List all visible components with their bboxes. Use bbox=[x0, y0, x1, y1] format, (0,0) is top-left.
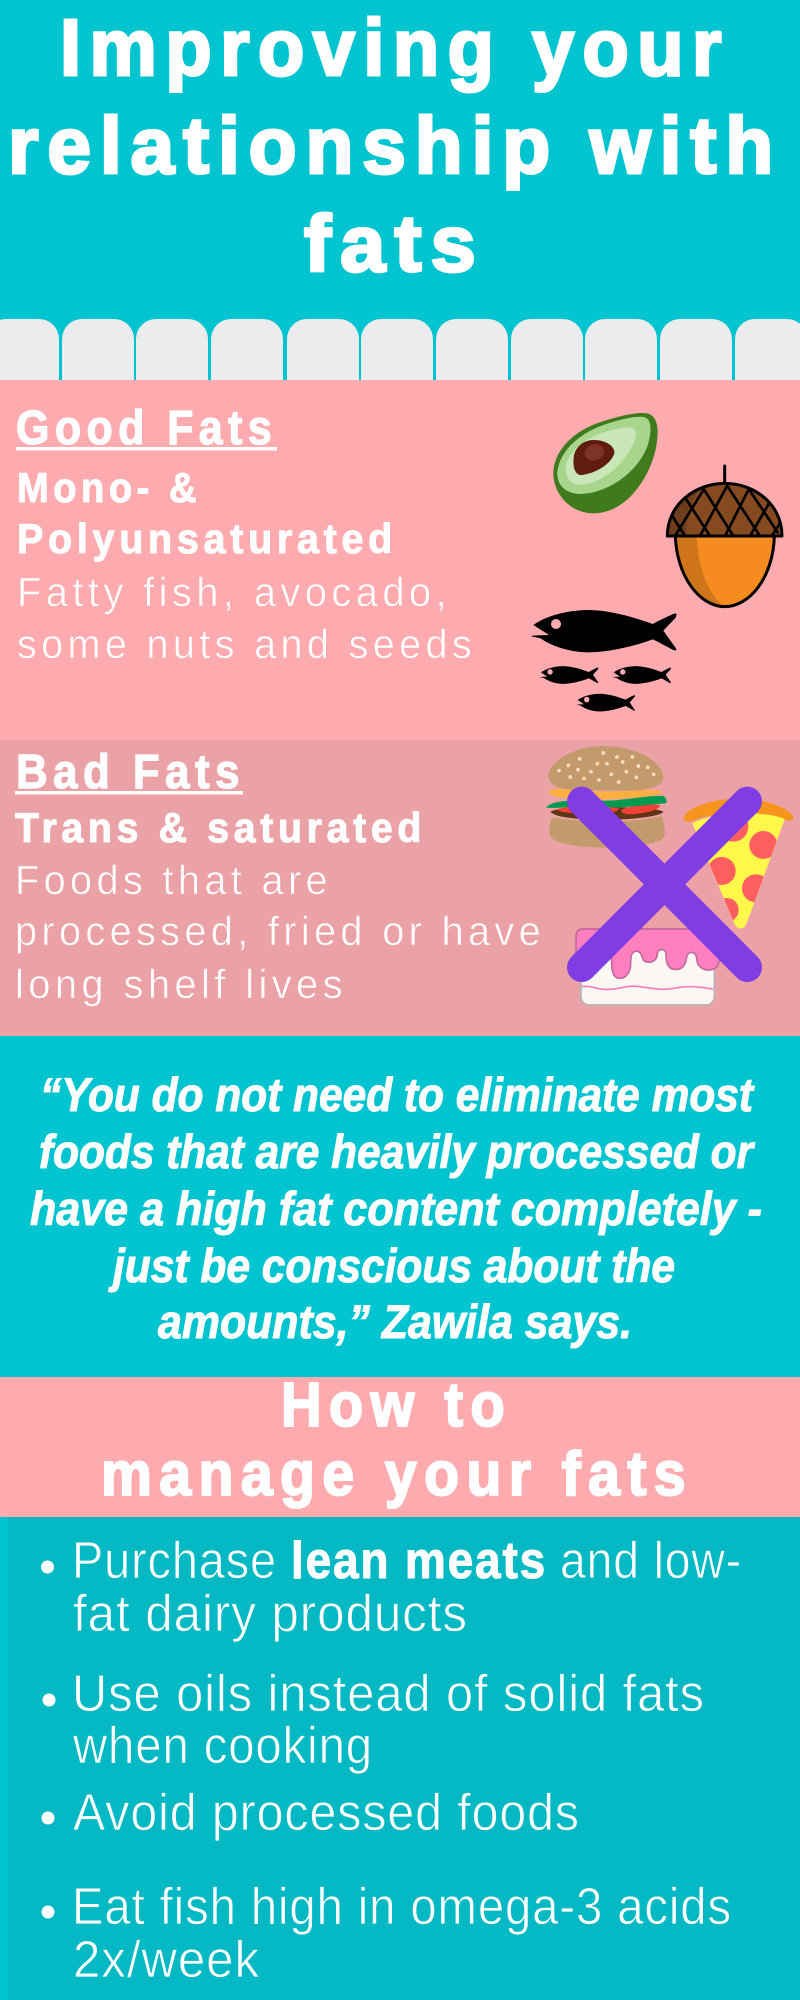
picket fence divider bbox=[0, 319, 800, 399]
quote bbox=[30, 1068, 762, 1348]
icon: acorn bbox=[667, 466, 783, 607]
panel: bad fats bbox=[0, 740, 800, 1036]
icon: cake bbox=[576, 929, 719, 1005]
panel: how to heading: manage your fats bbox=[101, 1440, 693, 1509]
quote: just be conscious about the bbox=[108, 1239, 675, 1292]
text: bad fat foods: Foods that are bbox=[15, 857, 332, 903]
panel: how to heading bbox=[0, 1371, 800, 1517]
tip: omega-3: 2x/week bbox=[73, 1931, 260, 1989]
tip: lean meats bbox=[41, 1532, 742, 1643]
heading: bad fats: Bad Fats bbox=[16, 746, 245, 799]
quote: amounts,” Zawila says. bbox=[158, 1295, 632, 1348]
tip: lean meats: Purchase bbox=[72, 1532, 277, 1590]
text: bad fat foods: processed, fried or have bbox=[15, 908, 545, 954]
text: good fat foods bbox=[17, 569, 476, 667]
tip: lean meats: fat dairy products bbox=[73, 1585, 468, 1643]
tip: processed foods: Avoid processed foods bbox=[73, 1784, 580, 1842]
title bbox=[8, 3, 782, 288]
title: Improving your bbox=[60, 3, 730, 92]
panel: how to heading: How to bbox=[281, 1371, 512, 1440]
panel: tips list bbox=[8, 1517, 800, 2000]
tip: lean meats: lean meats bbox=[291, 1532, 547, 1590]
tip: oils bbox=[42, 1665, 705, 1775]
subheading: mono and polyunsaturated: Polyunsaturated bbox=[17, 515, 397, 562]
tip: oils: Use oils instead of solid fats bbox=[72, 1665, 705, 1723]
text: bad fat foods: long shelf lives bbox=[15, 961, 347, 1007]
icon: purple cross bbox=[582, 801, 747, 967]
subheading: mono and polyunsaturated: Mono- & bbox=[17, 464, 201, 511]
tip: oils: when cooking bbox=[72, 1717, 373, 1775]
icon: small fish bbox=[540, 666, 671, 712]
subheading: mono and polyunsaturated bbox=[17, 464, 397, 562]
text: bad fat foods bbox=[15, 857, 545, 1007]
tip: omega-3: Eat fish high in omega-3 acids bbox=[72, 1878, 732, 1936]
tip: omega-3 bbox=[42, 1878, 732, 1989]
title: fats bbox=[304, 199, 485, 288]
icon: avocado bbox=[553, 413, 658, 513]
icon: burger bbox=[546, 746, 667, 848]
icon: large fish bbox=[531, 610, 677, 652]
icon: pizza slice bbox=[684, 798, 793, 929]
subheading: trans and saturated: Trans & saturated bbox=[15, 804, 426, 851]
tip: lean meats: and low- bbox=[560, 1532, 742, 1590]
text: good fat foods: some nuts and seeds bbox=[17, 621, 476, 667]
title: relationship with bbox=[8, 101, 782, 190]
panel: good fats bbox=[0, 380, 800, 740]
heading: good fats: Good Fats bbox=[16, 402, 277, 455]
text: good fat foods: Fatty fish, avocado, bbox=[17, 569, 451, 615]
